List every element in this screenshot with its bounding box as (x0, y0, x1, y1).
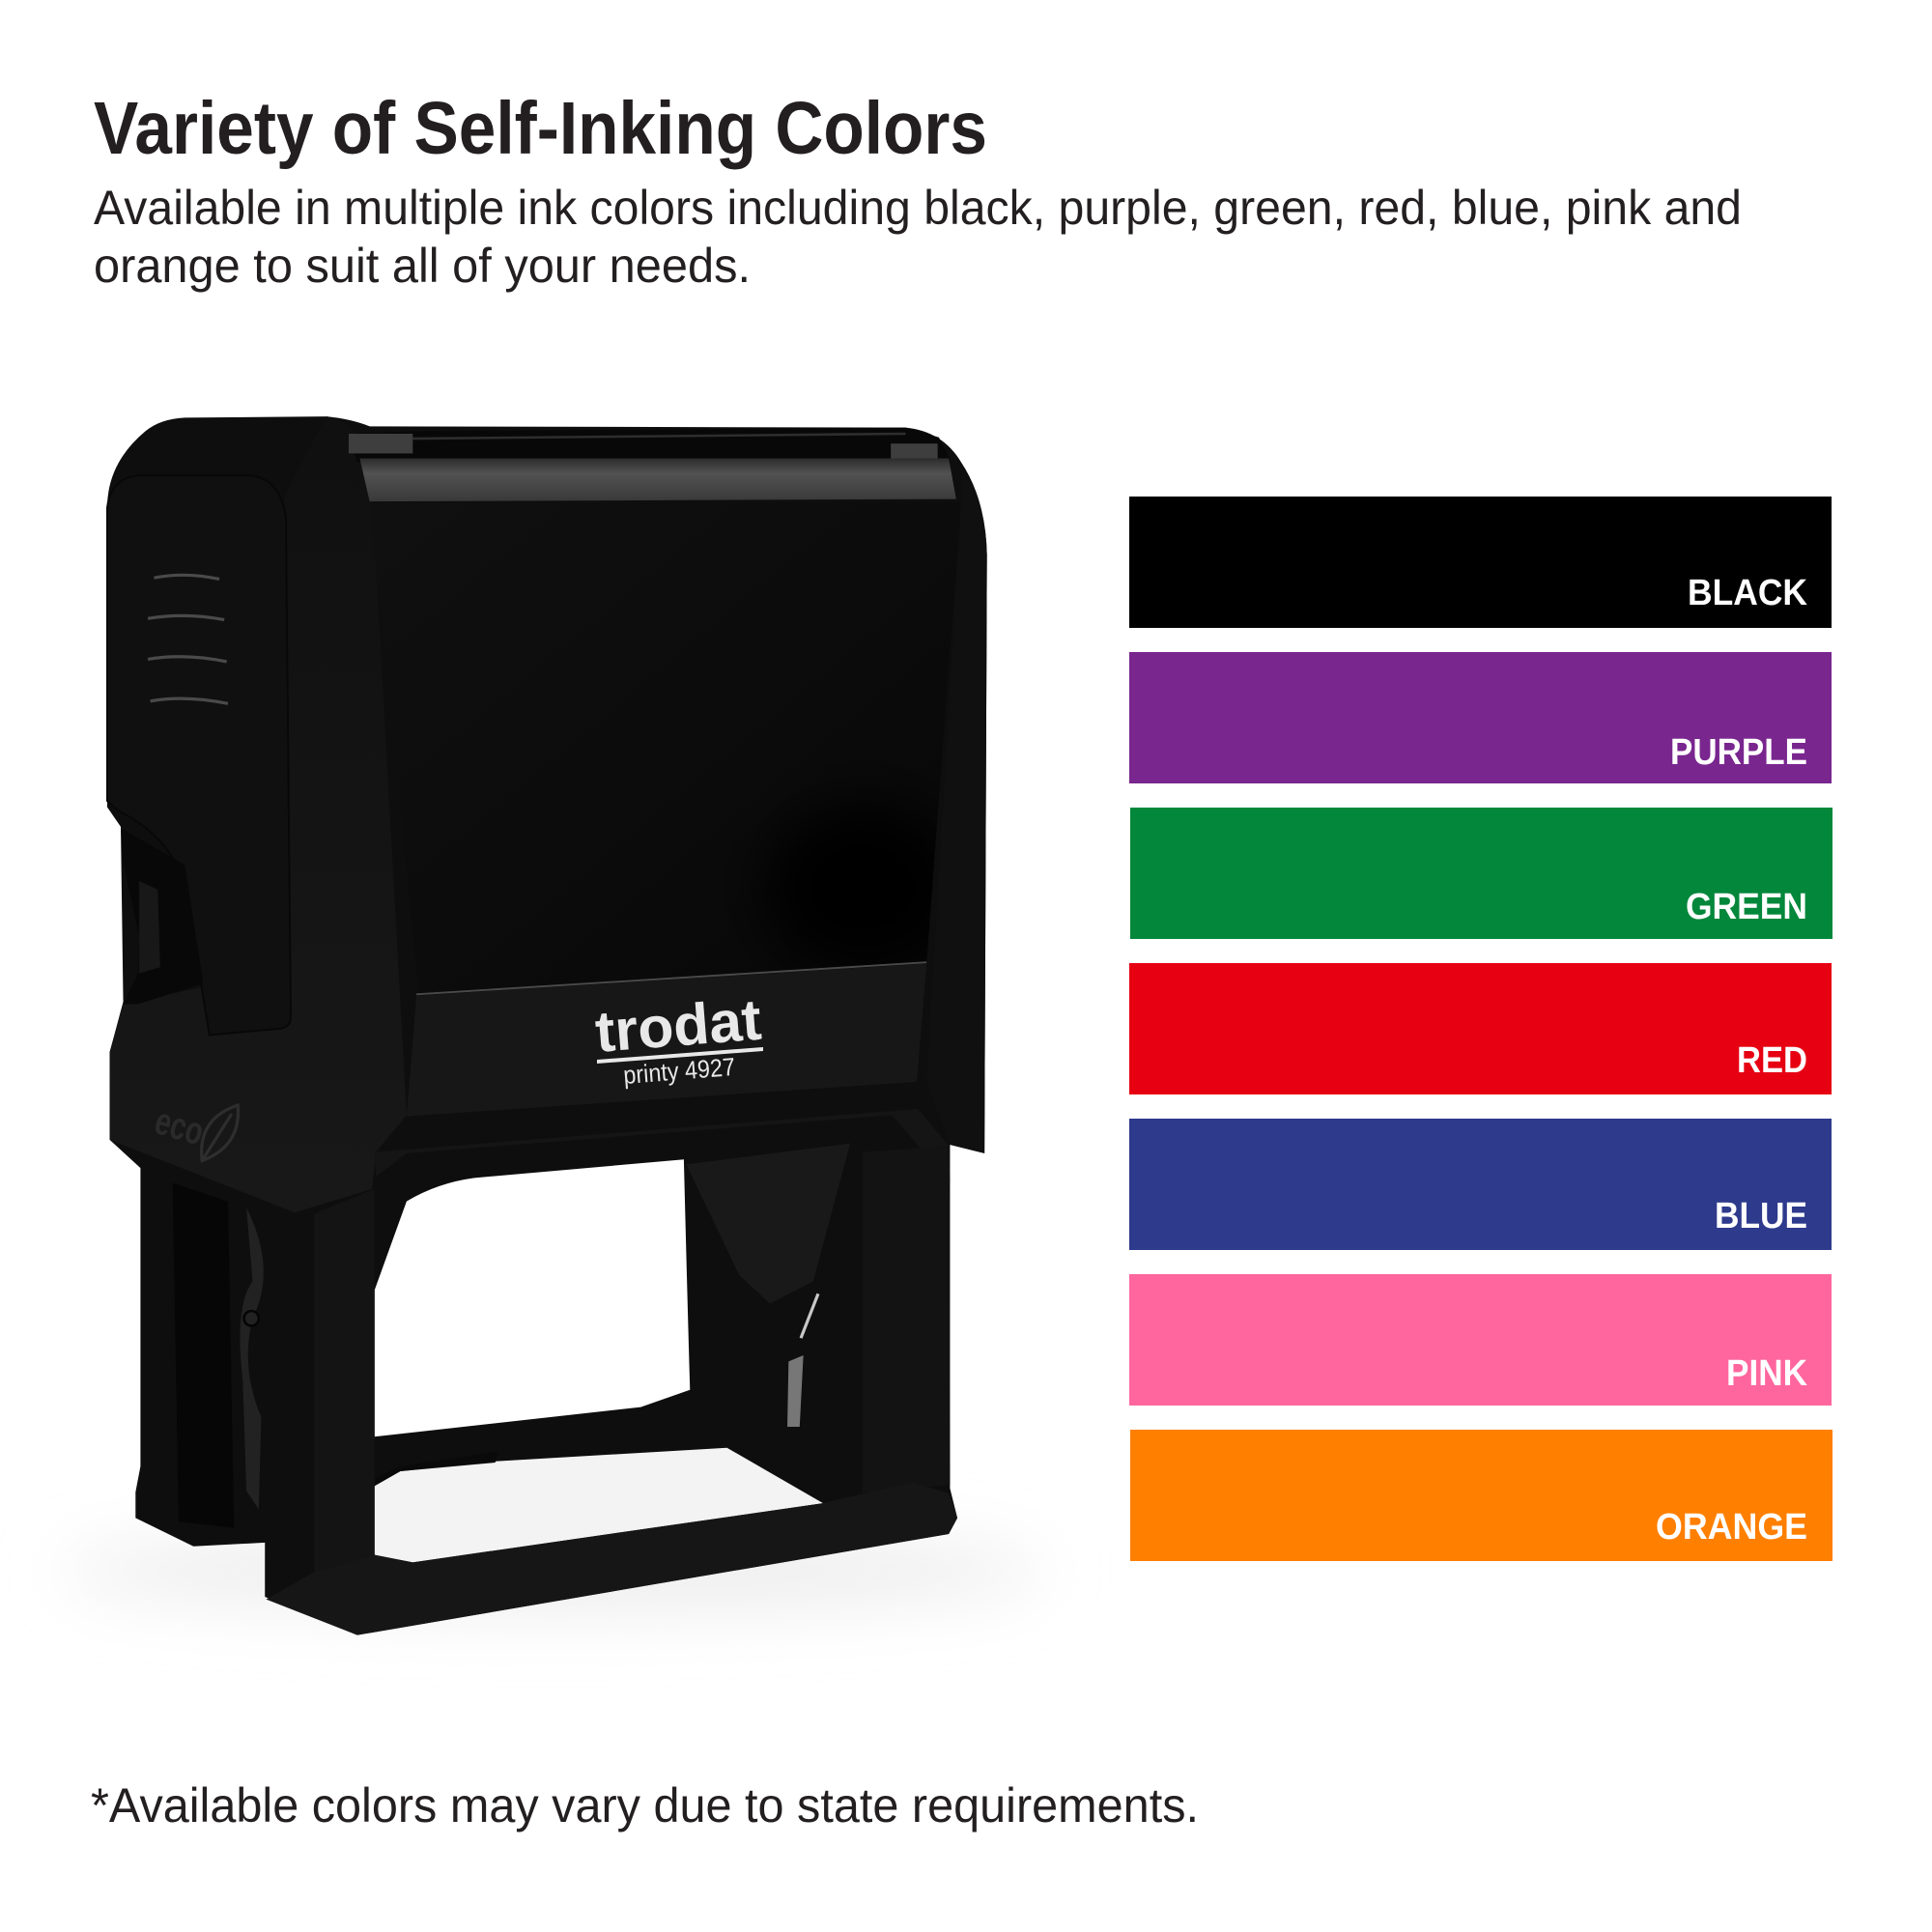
logo: trodat: printy 4927 (622, 1052, 736, 1090)
swatch: green: GREEN (1686, 887, 1807, 927)
stamp pad opening (375, 1448, 823, 1562)
front base lip (267, 1482, 957, 1635)
front column (314, 1189, 375, 1573)
swatch: blue: BLUE (1715, 1196, 1807, 1236)
swatch: orange: ORANGE (1656, 1507, 1807, 1548)
leaf icon (202, 1105, 238, 1161)
top rail (349, 428, 952, 462)
subtitle text block (94, 181, 1742, 293)
panel: color swatches (1129, 497, 1833, 1561)
side cover panel (107, 475, 291, 1035)
swatch: purple (1129, 652, 1832, 783)
subtitle text block: orange to suit all of your needs. (94, 239, 751, 293)
hinge tabs (349, 434, 938, 458)
embossed eco mark: eco (151, 1099, 209, 1153)
swatch: red: RED (1737, 1040, 1807, 1081)
front cover panel (370, 502, 961, 996)
swatch: pink: PINK (1726, 1353, 1808, 1394)
swatch: pink (1129, 1274, 1832, 1406)
swatch: purple: PURPLE (1670, 732, 1807, 773)
subtitle text block: Available in multiple ink colors including black, purple, green, red, blue, pink and (94, 181, 1742, 235)
logo: trodat: trodat (593, 987, 764, 1065)
floor shadow (62, 1531, 1047, 1610)
right side shell (926, 469, 987, 1153)
side shell (110, 416, 407, 1212)
swatch: black: BLACK (1688, 573, 1808, 613)
footnote: *Available colors may vary due to state requirements. (91, 1778, 1199, 1833)
swatch: black (1129, 497, 1832, 628)
lower front panel (407, 963, 926, 1117)
clear top strip (359, 458, 956, 501)
right column (863, 1146, 950, 1493)
swatch: blue (1129, 1119, 1832, 1250)
inner mechanism (686, 1144, 850, 1303)
left leg details (173, 1182, 234, 1528)
title: Variety of Self-Inking Colors (94, 87, 987, 170)
swatch: orange (1130, 1430, 1833, 1561)
lower frame bar (375, 1109, 950, 1182)
stamp silhouette (107, 416, 987, 1635)
swatch: green (1130, 808, 1833, 939)
panel glare shade (796, 832, 911, 927)
left recess (121, 828, 203, 1005)
side ribs (148, 575, 228, 703)
illustration: self-inking stamp (106, 416, 987, 1635)
swatch: red (1129, 963, 1832, 1094)
upper window opening (375, 1159, 690, 1436)
